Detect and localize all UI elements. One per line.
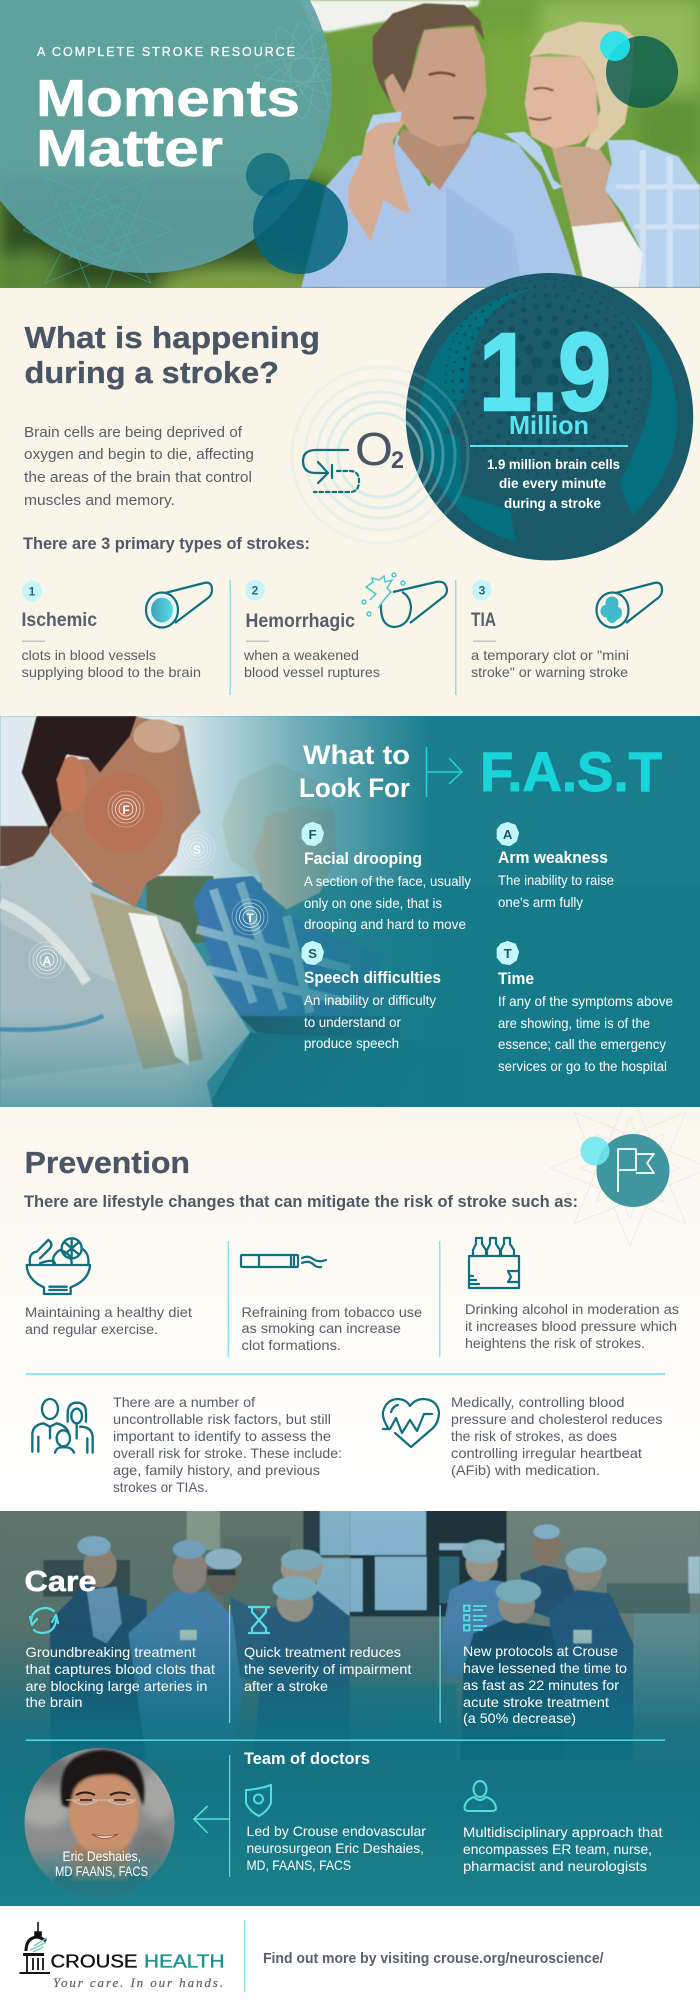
heading: what to look for: What to <box>303 740 410 770</box>
stat caption <box>487 457 620 511</box>
team text <box>463 1824 663 1874</box>
team text <box>246 1823 426 1873</box>
item: arm weakness: The inability to raise <box>498 872 614 888</box>
stat unit: Million <box>509 410 589 440</box>
heading <box>24 320 320 390</box>
icon: cigarette <box>241 1255 326 1267</box>
tip text <box>465 1301 679 1351</box>
logo: Crouse Health <box>20 1922 224 1990</box>
hero teal circle <box>0 0 332 273</box>
team text: MD, FAANS, FACS <box>246 1857 351 1873</box>
head silhouette <box>420 288 677 542</box>
dark small circle <box>246 153 290 197</box>
care text: as fast as 22 minutes for <box>463 1677 619 1693</box>
tip text: clot formations. <box>242 1337 341 1353</box>
number badge 2 <box>246 580 265 600</box>
divider <box>229 1605 230 1723</box>
white tee <box>128 913 189 1066</box>
tip text: heightens the risk of strokes. <box>465 1335 645 1351</box>
factor text: Medically, controlling blood <box>451 1394 624 1410</box>
stat caption: die every minute <box>499 476 606 491</box>
badge F <box>302 822 324 846</box>
woman shirt <box>605 140 700 287</box>
factor text: pressure and cholesterol reduces <box>451 1411 662 1427</box>
care text <box>463 1643 627 1726</box>
tip text: as smoking can increase <box>242 1320 401 1336</box>
icon: ruptured vessel <box>381 582 447 627</box>
number badge 1: 1 <box>29 584 36 598</box>
man shirt <box>301 132 580 287</box>
marker: S: S <box>193 843 201 857</box>
badge F: F <box>308 827 317 842</box>
icon: checklist <box>464 1606 487 1630</box>
man hair <box>373 3 484 103</box>
care text: Groundbreaking treatment <box>26 1644 196 1660</box>
arrow <box>426 747 462 797</box>
care text: have lessened the time to <box>463 1660 627 1676</box>
factor text: the risk of strokes, as does <box>451 1428 617 1444</box>
tip: tobacco <box>241 1255 422 1353</box>
acronym: F.A.S.T <box>480 740 662 803</box>
doctor caption <box>55 1848 148 1879</box>
woman <box>193 763 400 1049</box>
marker: T <box>232 899 268 935</box>
hair <box>22 716 137 829</box>
item: speech difficulties: to understand or <box>304 1014 401 1030</box>
doctor caption: Eric Deshaies, <box>62 1848 141 1864</box>
factor text <box>451 1394 662 1478</box>
right room part <box>350 1510 700 1760</box>
panel: care <box>0 1510 700 1906</box>
intro text: Brain cells are being deprived of <box>24 424 243 441</box>
team text: pharmacist and neurologists <box>463 1858 647 1874</box>
horizontal rule <box>26 1373 665 1375</box>
divider <box>439 1241 440 1357</box>
care text: that captures blood clots that <box>26 1661 215 1677</box>
oxygen symbol: 2 <box>391 447 404 474</box>
icon: shield <box>246 1785 271 1816</box>
divider <box>440 1605 441 1723</box>
tip text <box>242 1304 422 1353</box>
item: speech difficulties: produce speech <box>304 1035 399 1051</box>
icon: person <box>464 1781 496 1811</box>
star pattern <box>22 176 174 288</box>
divider <box>230 580 231 695</box>
icon: six pack <box>469 1238 519 1288</box>
number badge 2: 2 <box>252 584 259 598</box>
care text: are blocking large arteries in <box>26 1678 208 1694</box>
factor: uncontrollable <box>32 1394 342 1495</box>
green circle on photo <box>606 36 678 108</box>
number badge 1 <box>22 580 42 602</box>
left room part <box>0 1510 350 1760</box>
divider <box>455 580 456 695</box>
item: facial drooping: only on one side, that is <box>304 895 442 911</box>
team text: neurosurgeon Eric Deshaies, <box>246 1840 424 1856</box>
woman arm <box>348 112 411 242</box>
stroke type: TIA <box>471 580 662 680</box>
tip text: and regular exercise. <box>25 1321 158 1337</box>
wordmark: CROUSE <box>50 1952 138 1972</box>
divider <box>244 1920 245 1992</box>
factor text <box>113 1394 342 1495</box>
marker: A: A <box>43 954 52 968</box>
item: facial drooping <box>302 822 471 932</box>
care text <box>26 1644 215 1710</box>
factor text: strokes or TIAs. <box>113 1479 208 1495</box>
badge A: A <box>503 827 513 842</box>
icon: family <box>32 1399 93 1453</box>
tip text: Refraining from tobacco use <box>242 1304 422 1320</box>
marker: S <box>179 831 215 867</box>
marker: F <box>108 791 144 827</box>
heading: what to look for <box>299 740 410 803</box>
brain dot pattern <box>446 279 648 481</box>
title: Matter <box>36 120 223 178</box>
type description <box>471 647 629 680</box>
badge S: S <box>308 946 317 961</box>
type name: TIA <box>471 610 496 631</box>
statistic circle <box>406 273 693 560</box>
factor text: overall risk for stroke. These include: <box>113 1445 342 1461</box>
factor text: age, family history, and previous <box>113 1462 320 1478</box>
panel: F.A.S.T <box>0 716 700 1109</box>
item: time: If any of the symptoms above <box>498 993 673 1009</box>
tip text: Maintaining a healthy diet <box>25 1304 192 1320</box>
number badge 3: 3 <box>479 584 486 598</box>
tip: alcohol <box>465 1238 679 1351</box>
face details <box>66 1792 136 1838</box>
call to action: Find out more by visiting crouse.org/neuroscience/ <box>263 1951 604 1967</box>
item: time <box>497 941 673 1074</box>
heading: Prevention <box>24 1145 190 1180</box>
team text: encompasses ER team, nurse, <box>463 1841 652 1857</box>
stat caption: 1.9 million brain cells <box>487 457 620 472</box>
team item: lead <box>246 1785 426 1873</box>
shirt collar <box>90 893 203 1069</box>
oxygen symbol: O <box>355 423 393 475</box>
factor text: important to identify to assess the <box>113 1428 331 1444</box>
tip text <box>25 1304 192 1337</box>
care item: quick treatment <box>244 1607 412 1694</box>
divider <box>228 1241 229 1357</box>
man shoulders bottom area <box>212 1032 360 1107</box>
title: Moments <box>36 70 300 128</box>
care text: the severity of impairment <box>244 1661 412 1677</box>
item: time: Time <box>498 970 534 988</box>
stroke type: hemorrhagic <box>243 573 447 680</box>
tip text: it increases blood pressure which <box>465 1318 677 1334</box>
type description: a temporary clot or "mini <box>471 647 629 663</box>
type name: Hemorrhagic <box>246 611 355 632</box>
item: arm weakness <box>497 822 614 910</box>
factor text: There are a number of <box>113 1394 255 1410</box>
logo: Crouse Health: HEALTH <box>144 1952 224 1972</box>
team item: multidisciplinary <box>463 1781 663 1874</box>
tagline: Your care. In our hands. <box>53 1975 223 1990</box>
intro text: muscles and memory. <box>24 492 175 509</box>
care text: acute stroke treatment <box>463 1694 609 1710</box>
arrow <box>194 1806 230 1833</box>
factor text: uncontrollable risk factors, but still <box>113 1411 331 1427</box>
heading: what to look for: Look For <box>299 773 410 803</box>
signal rings <box>292 367 468 543</box>
item: time: essence; call the emergency <box>498 1036 666 1052</box>
footer <box>0 1906 700 2011</box>
white top <box>571 222 643 287</box>
item: facial drooping: drooping and hard to move <box>304 916 466 932</box>
type name: Ischemic <box>22 610 97 631</box>
item: facial drooping: A section of the face, usually <box>304 873 471 889</box>
ear <box>57 756 87 813</box>
type description: stroke" or warning stroke <box>471 664 628 680</box>
stat caption: during a stroke <box>504 496 601 511</box>
mandala pattern <box>254 22 332 118</box>
type description <box>22 647 201 680</box>
sky <box>0 716 424 884</box>
subheading: types: There are 3 primary types of strokes: <box>23 534 310 553</box>
icon: hourglass <box>248 1607 270 1633</box>
care text: the brain <box>26 1694 82 1710</box>
panel: what is happening <box>0 273 700 716</box>
intro text: oxygen and begin to die, affecting <box>24 446 254 463</box>
team text: Led by Crouse endovascular <box>246 1823 426 1839</box>
item: time: are showing, time is of the <box>498 1015 650 1031</box>
team text: Multidisciplinary approach that <box>463 1824 663 1840</box>
oxygen arrow icon <box>303 450 359 492</box>
item: arm weakness: Arm weakness <box>498 849 608 867</box>
item: speech difficulties <box>302 941 441 1051</box>
badge T: T <box>504 946 512 961</box>
team heading: Team of doctors <box>244 1750 370 1768</box>
eyebrow text: A COMPLETE STROKE RESOURCE <box>37 45 295 59</box>
icon: salad bowl <box>27 1238 90 1294</box>
factor text: (AFib) with medication. <box>451 1462 600 1478</box>
divider <box>229 1755 230 1877</box>
FAST photo: man and woman <box>0 716 700 1109</box>
icon: heart with pulse <box>383 1399 439 1447</box>
type description: supplying blood to the brain <box>22 664 201 680</box>
horizontal rule <box>26 1740 665 1741</box>
woman hair <box>529 22 634 150</box>
item: time: services or go to the hospital <box>498 1058 667 1074</box>
care text: after a stroke <box>244 1678 328 1694</box>
jacket <box>0 833 250 1109</box>
care text <box>244 1644 412 1694</box>
icon: refresh <box>30 1608 58 1633</box>
marker: T: T <box>246 911 254 925</box>
tip text: Drinking alcohol in moderation as <box>465 1301 679 1317</box>
heading: during a stroke? <box>24 355 279 390</box>
panel: hero <box>0 0 700 308</box>
item: arm weakness: one's arm fully <box>498 894 583 910</box>
heading: Care <box>24 1566 96 1598</box>
doctor caption: MD FAANS, FACS <box>55 1863 148 1879</box>
care photo: medical team <box>0 1510 700 1906</box>
type description: blood vessel ruptures <box>244 664 380 680</box>
intro text: the areas of the brain that control <box>24 469 252 486</box>
care text: New protocols at Crouse <box>463 1643 618 1659</box>
stroke type: ischemic <box>22 580 212 680</box>
heading: What is happening <box>24 320 320 355</box>
subheading: There are lifestyle changes that can mitigate the risk of stroke such as: <box>24 1192 578 1211</box>
factor text: controlling irregular heartbeat <box>451 1445 642 1461</box>
title <box>40 80 298 167</box>
icon: clotted vessel <box>146 583 212 628</box>
icon: temporary clot vessel <box>596 583 662 628</box>
icon: burst marks <box>362 573 405 616</box>
care text: (a 50% decrease) <box>463 1710 576 1726</box>
icon: dome building <box>20 1922 50 1974</box>
man face <box>384 27 487 147</box>
factor: medical <box>383 1394 662 1478</box>
badge T <box>497 941 519 965</box>
woman neck <box>551 147 625 227</box>
item: speech difficulties: An inability or difficulty <box>304 992 436 1008</box>
background building <box>0 826 50 866</box>
panel: prevention <box>0 1090 700 1511</box>
marker: A <box>29 942 65 978</box>
marker: F: F <box>122 803 130 817</box>
care item: treatment <box>26 1608 215 1710</box>
item: facial drooping: Facial drooping <box>304 850 422 868</box>
man neck <box>397 130 473 190</box>
type description <box>243 647 380 680</box>
tip: healthy diet <box>25 1238 192 1337</box>
cyan circle on photo <box>600 31 630 61</box>
type description: clots in blood vessels <box>22 647 156 663</box>
icon: flag badge <box>580 1134 670 1207</box>
number badge 3 <box>472 580 492 600</box>
doctor portrait <box>20 1748 180 1900</box>
care item: protocols <box>463 1606 627 1726</box>
item: speech difficulties: Speech difficulties <box>304 969 441 987</box>
type description: when a weakened <box>243 647 359 663</box>
stat number: 1.9 <box>479 311 611 434</box>
star pattern <box>550 1090 700 1246</box>
intro text <box>24 424 254 509</box>
hero photo: couple in vineyard <box>0 0 700 298</box>
care text: Quick treatment reduces <box>244 1644 401 1660</box>
dark large circle <box>253 179 348 274</box>
woman face <box>525 57 598 148</box>
face <box>50 716 201 908</box>
